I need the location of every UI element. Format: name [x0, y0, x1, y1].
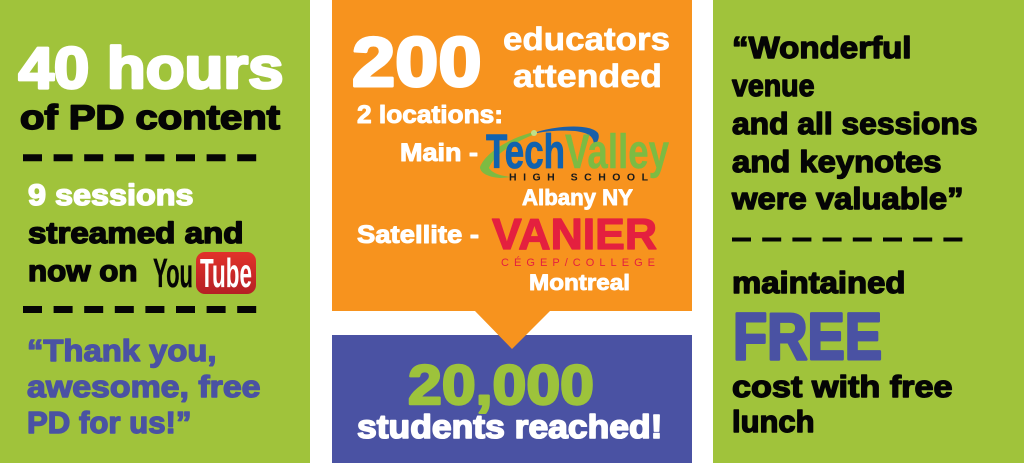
stat: 200 educators attended: educators	[503, 21, 670, 57]
stat: 200 educators attended: attended	[513, 58, 662, 94]
logo: Tech Valley High School: Tech	[486, 126, 565, 179]
text: Montreal: Montreal	[529, 270, 630, 295]
quote: wonderful venue: were valuable”	[731, 181, 964, 216]
icon: YouTube logo: Tube	[200, 250, 252, 296]
quote: wonderful venue: “Wonderful	[732, 30, 912, 65]
quote: wonderful venue: and keynotes	[732, 144, 942, 179]
stat: 200 educators attended: 200	[352, 23, 482, 101]
quote: thank you: awesome, free	[27, 369, 260, 404]
text: FREE: FREE	[733, 299, 882, 373]
stat: 200 educators attended	[352, 21, 670, 101]
text: 2 locations: 2 locations:	[357, 101, 503, 129]
text: sessions streamed	[28, 179, 244, 288]
heading: 40 hours of PD content	[18, 36, 284, 137]
logo: Vanier College: VANIER	[492, 210, 657, 259]
heading: 40 hours of PD content: 40 hours	[18, 36, 284, 101]
dashed separator	[23, 306, 257, 313]
text: sessions streamed: now on	[28, 255, 138, 288]
text: cost with free lunch: lunch	[732, 404, 814, 439]
quote: wonderful venue: venue	[732, 68, 814, 103]
stat: 20,000: 20,000	[408, 353, 594, 416]
text: cost with free lunch	[732, 369, 952, 439]
text: Albany NY: Albany NY	[522, 185, 633, 210]
dashed separator	[732, 238, 963, 242]
heading: 40 hours of PD content: of PD content	[20, 99, 280, 137]
text: main: Main -	[400, 139, 478, 167]
quote: wonderful venue	[731, 30, 978, 216]
panel: right green column	[713, 0, 1024, 463]
logo: Tech Valley High School: HIGH SCHOOL	[509, 172, 649, 184]
text: satellite: Satellite -	[357, 221, 479, 249]
text: cost with free lunch: cost with free	[732, 369, 952, 404]
logo: Tech Valley High School: Valley	[565, 126, 669, 179]
icon: YouTube logo: You	[153, 250, 193, 296]
panel: orange attendance	[332, 0, 692, 349]
text: sessions streamed: 9 sessions	[28, 179, 194, 212]
quote: wonderful venue: and all sessions	[732, 106, 978, 141]
text: maintained: maintained	[732, 265, 906, 300]
quote: thank you	[27, 333, 260, 440]
quote: thank you: “Thank you,	[27, 333, 216, 368]
text: students reached: students reached!	[357, 408, 662, 445]
quote: thank you: PD for us!”	[27, 405, 192, 440]
dashed separator	[23, 154, 257, 161]
panel: blue students reached	[332, 335, 692, 463]
logo: Vanier College: CÉGEP/COLLEGE	[501, 256, 655, 269]
panel: left green column	[0, 0, 310, 463]
text: sessions streamed: streamed and	[28, 217, 244, 250]
logo: Tech Valley High School	[480, 126, 669, 184]
